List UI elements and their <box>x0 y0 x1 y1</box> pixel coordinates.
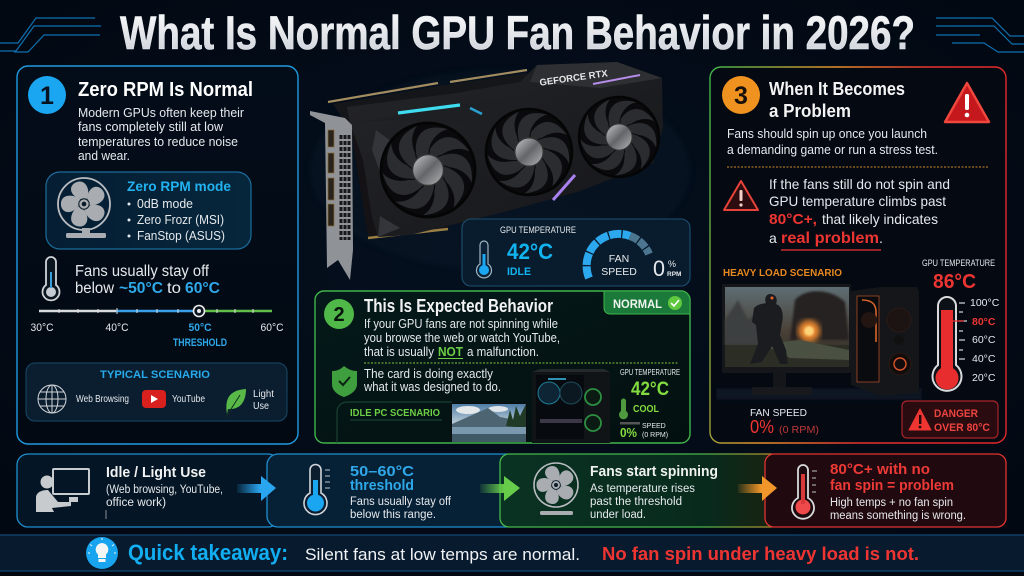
panel 1 description: temperatures to reduce noise <box>78 134 238 149</box>
hot temperature readout: GPU TEMPERATURE <box>922 258 995 268</box>
icon: leaf <box>226 389 246 417</box>
PCIe bracket <box>310 111 353 280</box>
panel 1 description: fans completely still at low <box>78 119 224 134</box>
icon: warning triangle large <box>945 83 989 122</box>
zero RPM mode list: Zero Frozr (MSI) <box>137 213 224 227</box>
thermometer chart: 20°C <box>972 372 996 384</box>
step 3 description: under load. <box>590 509 646 521</box>
idle PC tower <box>532 369 610 443</box>
number badge 2: 2 <box>333 304 345 326</box>
number badge 3 <box>722 76 760 114</box>
problem statement: . <box>879 230 883 246</box>
fans off text: to <box>167 280 181 297</box>
panel 2 description <box>364 316 560 359</box>
danger callout: DANGER <box>934 408 978 420</box>
takeaway normal statement: Silent fans at low temps are normal. <box>305 545 580 564</box>
step 1 description <box>106 484 223 519</box>
decorative circuit lines left <box>0 18 101 52</box>
fans off text: ~50°C <box>119 280 163 297</box>
danger callout <box>902 401 998 438</box>
zero RPM mode heading: Zero RPM mode <box>127 178 231 194</box>
thermometer chart <box>933 297 1000 391</box>
danger callout: OVER 80°C <box>934 422 990 434</box>
icon: person at computer <box>36 469 89 512</box>
temperature 42C: 42°C <box>507 239 553 264</box>
icon: thermometer <box>304 465 330 515</box>
fans off text: Fans usually stay off <box>75 263 210 280</box>
thermometer chart: 60°C <box>972 334 996 346</box>
GPU graphics card <box>310 62 690 280</box>
panel 1 description: Modern GPUs often keep their <box>78 105 245 120</box>
panel 3 description: Fans should spin up once you launch <box>727 126 927 141</box>
thermometer chart: 80°C <box>972 316 996 328</box>
fans off text: below <box>75 280 115 297</box>
step 2 description: Fans usually stay off <box>350 496 452 508</box>
hot temperature readout <box>922 258 995 293</box>
step 1 description: (Web browsing, YouTube, <box>106 484 223 496</box>
gaming monitor <box>716 284 922 400</box>
takeaway bar <box>0 535 1024 571</box>
fan speed value: % <box>668 259 676 269</box>
icon: lightbulb <box>86 537 118 569</box>
temperature scale: 30°C <box>30 322 54 334</box>
idle temperature readout: 42°C <box>631 379 669 400</box>
step 3 description <box>590 483 695 521</box>
panel 1 heading: Zero RPM Is Normal <box>78 79 253 101</box>
icon: cool thermometer <box>619 399 628 419</box>
zero RPM mode list: 0dB mode <box>137 197 193 211</box>
flow step 3: fans start spinning <box>500 454 780 527</box>
step 1 description: office work) <box>106 497 166 509</box>
fan speed value <box>653 256 681 281</box>
icon: YouTube <box>142 390 166 408</box>
panel: when it becomes a problem <box>710 67 1006 443</box>
fan speed label <box>601 253 637 278</box>
fan speed value: RPM <box>667 271 681 278</box>
problem statement: a <box>769 230 777 246</box>
number badge 3: 3 <box>734 82 748 110</box>
heavy load label: HEAVY LOAD SCENARIO <box>723 267 842 279</box>
step 4 description <box>830 497 966 522</box>
panel 3 description <box>727 126 938 157</box>
GPU status box <box>462 219 690 286</box>
problem statement: that likely indicates <box>822 211 938 227</box>
panel 2 heading: This Is Expected Behavior <box>364 295 553 316</box>
fan speed readout: FAN SPEED <box>750 407 807 419</box>
panel: expected behavior <box>315 291 690 443</box>
fan speed label: SPEED <box>601 266 637 278</box>
problem statement <box>769 176 950 250</box>
step 4 description: High temps + no fan spin <box>830 497 953 509</box>
panel 3 description: a demanding game or run a stress test. <box>727 142 938 157</box>
icon: fan <box>58 178 110 238</box>
typical scenario box <box>26 363 287 421</box>
problem statement: If the fans still do not spin and <box>769 176 950 192</box>
idle temperature readout <box>619 368 680 440</box>
panel 3 heading <box>769 78 905 121</box>
gaming PC tower <box>851 287 919 396</box>
step 2 heading: threshold <box>350 477 414 494</box>
icon: warning triangle small <box>724 181 758 210</box>
temperature scale <box>30 306 284 349</box>
fan 3 <box>574 91 666 183</box>
fan speed gauge <box>587 234 649 278</box>
zero RPM mode list <box>128 197 225 243</box>
flow step 4: problem <box>765 454 1006 527</box>
step 1 heading: Idle / Light Use <box>106 464 206 481</box>
fan speed readout: 0% <box>750 417 774 437</box>
normal badge: NORMAL <box>613 297 662 311</box>
step 4 heading: 80°C+ with no <box>830 461 930 478</box>
monitor image: landscape <box>451 403 527 442</box>
icon: fan <box>534 463 578 515</box>
idle temperature readout: GPU TEMPERATURE <box>620 368 680 377</box>
typical scenario heading: TYPICAL SCENARIO <box>100 369 210 381</box>
temperature scale: 40°C <box>106 322 129 334</box>
temperature scale: THRESHOLD <box>173 337 227 349</box>
quick takeaway label: Quick takeaway: <box>128 540 288 565</box>
step 2 description: below this range. <box>350 509 436 521</box>
temperature scale: 60°C <box>260 322 284 334</box>
light use label <box>253 388 274 412</box>
idle temperature readout: (0 RPM) <box>642 432 668 439</box>
icon: blue thermometer <box>477 241 492 278</box>
problem statement: GPU temperature climbs past <box>769 193 946 209</box>
panel 2 description: NOT <box>438 344 463 359</box>
flow step 1: idle light use <box>17 454 279 527</box>
fan speed readout <box>750 407 819 437</box>
problem statement: real problem <box>781 230 879 247</box>
problem statement: 80°C+, <box>769 211 817 228</box>
fan speed value: 0 <box>653 256 665 281</box>
design statement <box>363 366 501 394</box>
idle PC scenario label: IDLE PC SCENARIO <box>350 407 440 419</box>
panel 2 description: that is usually <box>364 344 434 359</box>
panel 3 heading: a Problem <box>769 100 851 121</box>
panel 2 description: you browse the web or watch YouTube, <box>364 330 560 345</box>
fan 2 <box>481 103 579 202</box>
icon: thermometer <box>43 257 60 300</box>
idle temperature readout: 0% <box>620 425 637 440</box>
step 2 heading <box>350 463 414 494</box>
idle temperature readout: COOL <box>633 403 659 415</box>
panel: zero RPM is normal <box>17 66 298 444</box>
icon: shield <box>332 366 357 397</box>
YouTube label: YouTube <box>172 393 205 405</box>
fan 1 <box>375 116 483 225</box>
icon: globe <box>38 385 66 413</box>
arrow: idle to threshold <box>237 476 276 501</box>
idle label: IDLE <box>507 266 531 278</box>
step 4 heading: fan spin = problem <box>830 477 954 494</box>
panel 3 heading: When It Becomes <box>769 78 905 99</box>
step 3 description: As temperature rises <box>590 483 695 495</box>
thermometer chart: 40°C <box>972 353 996 365</box>
light use label: Use <box>253 400 269 412</box>
idle temperature readout: SPEED <box>642 423 666 430</box>
zero RPM mode box <box>46 172 251 249</box>
fans off text: 60°C <box>185 280 220 297</box>
step 3 heading: Fans start spinning <box>590 464 718 480</box>
fan speed readout: (0 RPM) <box>779 424 819 436</box>
panel 2 description: If your GPU fans are not spinning while <box>364 316 558 331</box>
hot temperature readout: 86°C <box>933 271 976 293</box>
step 2 heading: 50–60°C <box>350 463 414 480</box>
panel 2 description: a malfunction. <box>467 344 539 359</box>
step 4 description: means something is wrong. <box>830 510 966 522</box>
light use label: Light <box>253 388 274 400</box>
design statement: The card is doing exactly <box>364 366 493 381</box>
status label: GPU TEMPERATURE <box>500 225 576 235</box>
idle PC scenario label <box>337 402 452 443</box>
number badge 1 <box>28 76 66 114</box>
panel 1 description <box>78 105 245 163</box>
GeForce RTX label: GEFORCE RTX <box>539 68 609 89</box>
temperature scale: 50°C <box>188 322 212 334</box>
panel 1 description: and wear. <box>78 148 130 163</box>
flow step 2: threshold <box>267 454 517 527</box>
decorative circuit lines right <box>936 18 1024 52</box>
web browsing label: Web Browsing <box>76 393 129 405</box>
fan speed label: FAN <box>609 253 629 265</box>
design statement: what it was designed to do. <box>363 379 501 394</box>
icon: hot thermometer <box>792 465 817 519</box>
thermometer chart: 100°C <box>970 297 1000 309</box>
takeaway problem statement: No fan spin under heavy load is not. <box>602 544 919 564</box>
fans off text <box>75 263 220 297</box>
number badge 2 <box>324 299 354 329</box>
step 2 description <box>350 496 452 521</box>
normal badge <box>604 291 690 314</box>
arrow: threshold to fans <box>480 476 520 501</box>
step 4 heading <box>830 461 954 494</box>
zero RPM mode list: FanStop (ASUS) <box>137 229 225 243</box>
step 3 description: past the threshold <box>590 496 682 508</box>
number badge 1: 1 <box>40 82 54 110</box>
arrow: fans to problem <box>738 476 777 501</box>
